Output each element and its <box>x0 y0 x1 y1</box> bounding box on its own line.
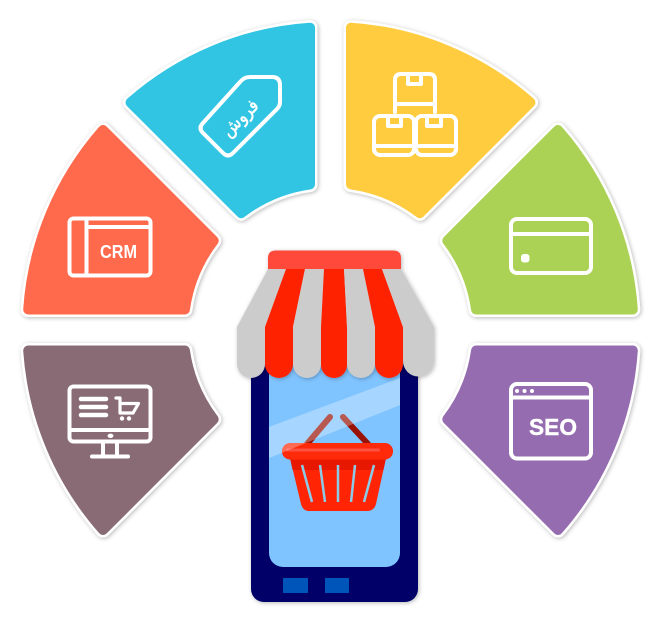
panel: online shop, brown sector <box>28 350 214 530</box>
phone buttons <box>283 578 349 593</box>
panel: CRM, red sector <box>28 130 214 310</box>
panel: payment, green sector <box>447 130 633 310</box>
icon: monitor with shopping cart <box>70 386 150 456</box>
CRM label: CRM <box>100 242 137 262</box>
phone store illustration <box>237 250 434 602</box>
panel: products, yellow sector <box>351 28 530 213</box>
icon: price tag <box>200 77 280 156</box>
phone body <box>251 340 418 602</box>
panel: SEO, purple sector <box>447 350 633 530</box>
screen reflection <box>269 378 400 458</box>
awning top band <box>268 250 401 269</box>
icon: stacked boxes <box>374 74 456 155</box>
SEO label: SEO <box>529 414 577 440</box>
icon: CRM window <box>70 218 150 276</box>
icon: SEO browser window <box>511 384 591 458</box>
icon: credit card <box>511 219 591 273</box>
phone screen <box>269 364 400 567</box>
tag label: فروش <box>217 95 263 141</box>
shopping basket <box>282 417 393 511</box>
striped awning <box>237 250 434 378</box>
panel: sales tag, blue sector <box>130 28 310 213</box>
